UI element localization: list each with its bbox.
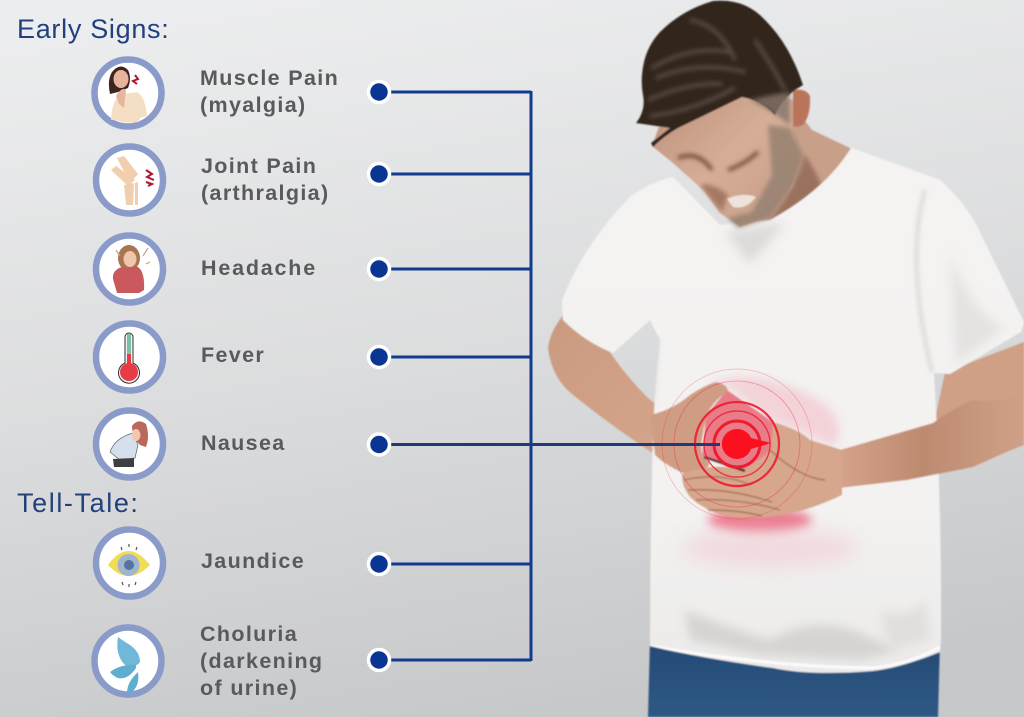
connector dots — [368, 82, 390, 670]
grey temple — [750, 92, 790, 125]
right upper arm — [935, 342, 1024, 470]
nose shadow — [700, 184, 728, 212]
label: Choluria: of urine) — [200, 676, 298, 700]
upper hand — [650, 382, 728, 473]
label: Muscle Pain: Muscle Pain — [200, 66, 339, 90]
label: Joint Pain: (arthralgia) — [201, 181, 330, 205]
icon: thermometer — [96, 324, 163, 390]
mouth — [727, 195, 756, 208]
heading: Early Signs: Early Signs: — [17, 14, 169, 44]
label: Nausea: Nausea — [201, 431, 286, 455]
heading: Tell-Tale: Tell-Tale: — [17, 488, 140, 518]
left upper arm — [548, 312, 680, 458]
label: Fever: Fever — [201, 343, 265, 367]
neck — [745, 95, 852, 232]
icon: headache — [96, 236, 163, 302]
palm slit — [704, 457, 745, 471]
eye shadow — [678, 152, 758, 170]
head — [636, 1, 810, 228]
photo: man holding his abdomen — [548, 1, 1024, 717]
icon: muscle pain — [94, 60, 162, 126]
pain centre dot — [722, 429, 771, 459]
beard stubble — [728, 125, 804, 228]
shirt shading — [650, 190, 1005, 668]
finger creases — [684, 450, 825, 516]
hair highlights — [648, 20, 785, 116]
icon: nausea — [96, 410, 163, 478]
icon: joint pain — [96, 146, 163, 214]
forearm — [822, 395, 1024, 490]
label: Choluria: Choluria — [200, 622, 298, 646]
label: Muscle Pain: (myalgia) — [200, 93, 307, 117]
face — [652, 85, 803, 227]
neck shadow — [768, 155, 822, 222]
t-shirt — [562, 148, 1024, 673]
jeans — [648, 640, 940, 717]
hands and right forearm — [650, 382, 1024, 518]
pain target rings — [662, 369, 812, 519]
icon: water drops — [94, 628, 162, 694]
lower hand — [682, 422, 842, 518]
label: Joint Pain: Joint Pain — [201, 154, 317, 178]
label: Jaundice: Jaundice — [201, 549, 305, 573]
connector lines — [390, 91, 720, 661]
ear — [793, 90, 810, 127]
label: Choluria: (darkening — [200, 649, 323, 673]
abdominal red stain — [680, 377, 860, 568]
icon: jaundice eye — [96, 530, 163, 596]
label: Headache: Headache — [201, 256, 317, 280]
hair — [636, 1, 803, 147]
